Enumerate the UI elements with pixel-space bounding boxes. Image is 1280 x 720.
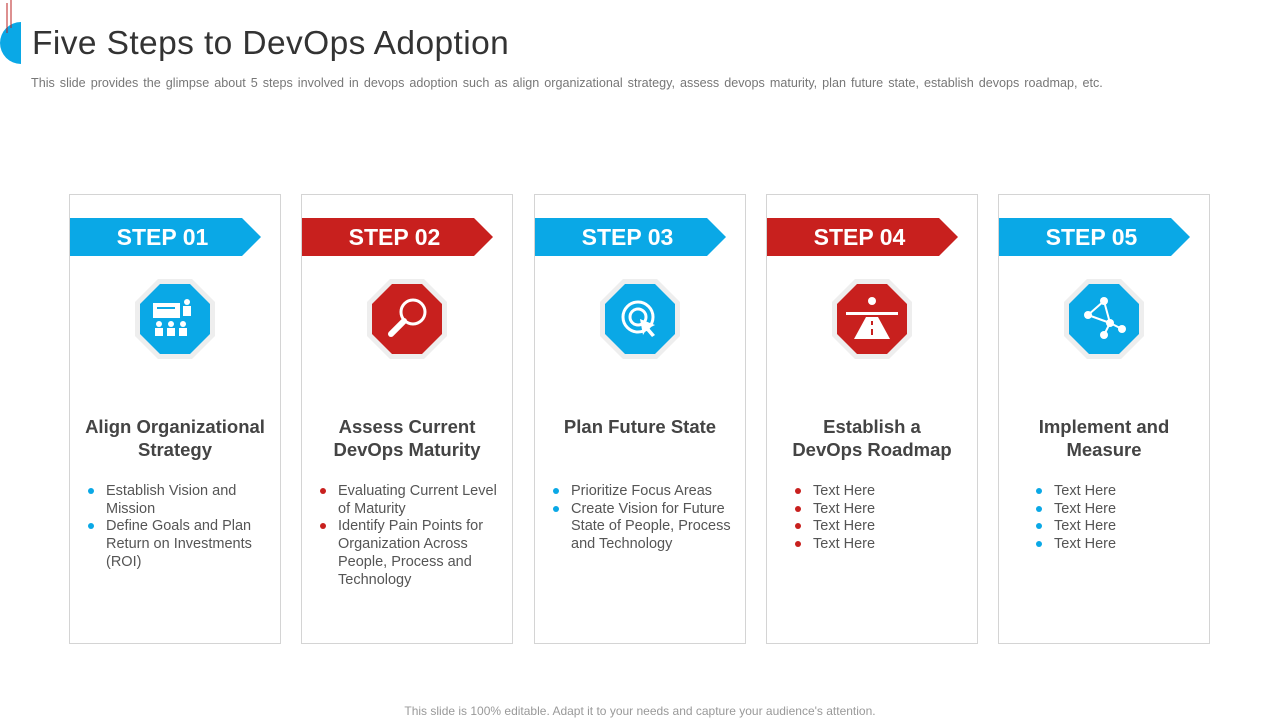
heading: Establish a — [823, 416, 921, 437]
heading: Strategy — [138, 439, 212, 460]
banner: step 03: STEP 03 — [582, 224, 673, 250]
subtitle: This slide provides the glimpse about 5 steps involved in devops adoption such as align organizational strategy, assess devops maturity, plan future state, establish devops roadmap, etc. — [31, 76, 1103, 90]
heading: Plan Future State — [564, 416, 716, 437]
bullets: Text Here — [813, 518, 875, 534]
logo mark — [0, 0, 21, 64]
bullets — [320, 483, 497, 588]
heading — [85, 416, 265, 460]
footer: This slide is 100% editable. Adapt it to your needs and capture your audience's attention. — [404, 704, 876, 718]
bullets: Prioritize Focus Areas — [571, 483, 712, 499]
heading: Assess Current — [339, 416, 475, 437]
bullets: Text Here — [1054, 536, 1116, 552]
heading — [1039, 416, 1169, 460]
panel: step 03 — [534, 194, 746, 644]
panel: step 05 — [998, 194, 1210, 644]
bullets: Text Here — [1054, 501, 1116, 517]
icon: road — [832, 279, 912, 359]
banner: step 02: STEP 02 — [349, 224, 440, 250]
icon: target — [600, 279, 680, 359]
title: Five Steps to DevOps Adoption — [32, 25, 509, 62]
bullets: Text Here — [1054, 518, 1116, 534]
bullets — [1036, 483, 1116, 552]
bullets: Define Goals and Plan Return on Investments (ROI) — [106, 518, 252, 570]
banner: step 01 — [70, 218, 261, 256]
icon: magnifier — [367, 279, 447, 359]
panel: step 02 — [301, 194, 513, 644]
banner: step 01: STEP 01 — [117, 224, 208, 250]
banner: step 03 — [535, 218, 726, 256]
icon: presentation — [135, 279, 215, 359]
panel: step 04 — [766, 194, 978, 644]
heading — [792, 416, 952, 460]
bullets: Text Here — [1054, 483, 1116, 499]
bullets: Text Here — [813, 501, 875, 517]
bullets: Establish Vision and Mission — [106, 483, 236, 517]
bullets — [795, 483, 875, 552]
heading: DevOps Maturity — [333, 439, 480, 460]
banner: step 02 — [302, 218, 493, 256]
heading: DevOps Roadmap — [792, 439, 952, 460]
banner: step 05 — [999, 218, 1190, 256]
heading: Implement and — [1039, 416, 1169, 437]
icon: network — [1064, 279, 1144, 359]
banner: step 04: STEP 04 — [814, 224, 905, 250]
banner: step 04 — [767, 218, 958, 256]
bullets: Identify Pain Points for Organization Across People, Process and Technology — [338, 518, 483, 588]
panel: step 01 — [69, 194, 281, 644]
heading: Align Organizational — [85, 416, 265, 437]
bullets — [88, 483, 252, 570]
bullets: Create Vision for Future State of People, Process and Technology — [571, 501, 731, 552]
bullets: Text Here — [813, 536, 875, 552]
bullets — [553, 483, 731, 552]
bullets: Text Here — [813, 483, 875, 499]
heading — [333, 416, 480, 460]
heading: Measure — [1066, 439, 1142, 460]
bullets: Evaluating Current Level of Maturity — [338, 483, 497, 517]
banner: step 05: STEP 05 — [1046, 224, 1137, 250]
